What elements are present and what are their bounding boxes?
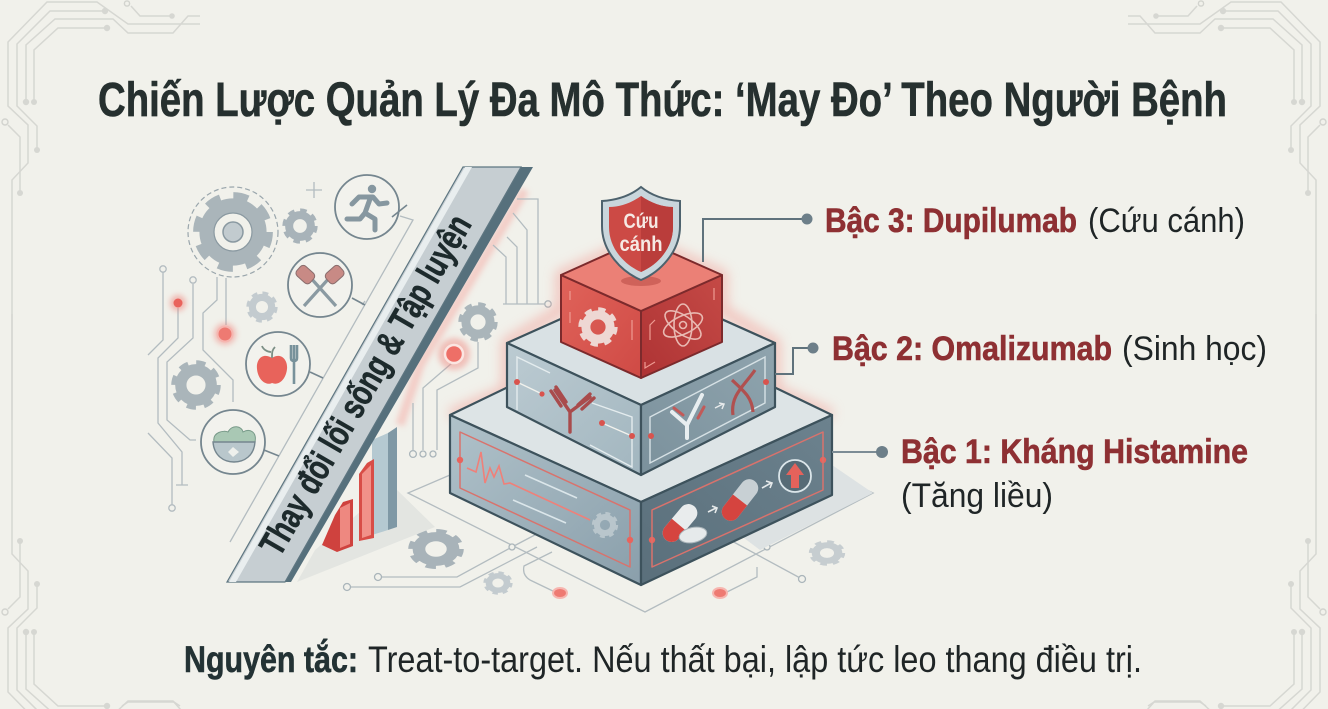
icon: atom	[660, 304, 706, 346]
arrow	[762, 481, 772, 488]
gear near ribbon	[462, 306, 494, 338]
tier 2 left face	[507, 343, 641, 475]
red glow along ribbon	[400, 190, 525, 425]
ribbon text: Thay đổi lối sống & Tập luyện	[251, 207, 479, 562]
tier 2	[507, 283, 775, 475]
icon: crossed dumbbells	[288, 253, 365, 317]
red bar short	[322, 499, 353, 552]
tier 2 name: Bậc 2: Omalizumab	[832, 330, 1112, 368]
floor terminals	[344, 544, 806, 590]
red nodes	[457, 457, 826, 543]
decorative circuit lines, left	[148, 272, 233, 505]
shield face	[609, 196, 673, 272]
connector: tier 3	[703, 214, 812, 262]
icon: capsule	[718, 476, 762, 524]
bar shadow	[297, 485, 435, 582]
tier 2 right inset	[650, 357, 765, 463]
connecting line parallel to ribbon	[230, 216, 413, 542]
bottom border trapezoids	[122, 702, 1206, 706]
tier 1 left face	[450, 415, 641, 585]
floor red node right	[713, 588, 727, 598]
footer lead: Nguyên tắc:	[184, 638, 358, 680]
tier 2 right face	[641, 343, 775, 475]
big gear with dashed orbit	[188, 187, 278, 277]
circuit border: top right	[1128, 1, 1326, 420]
footer principle	[184, 638, 1142, 680]
floor gear small	[486, 573, 510, 593]
small gear	[285, 211, 315, 241]
icon: gear on red face	[582, 311, 614, 343]
red node core	[174, 298, 182, 308]
icon: increase dose	[779, 460, 811, 492]
panel: floor circuit	[344, 473, 873, 612]
label: tier 2	[832, 330, 1267, 368]
tier 3 name: Bậc 3: Dupilumab	[825, 202, 1077, 240]
terminal	[545, 301, 551, 307]
tier 2 left inset	[517, 357, 632, 467]
floor gear right	[812, 542, 842, 564]
red node glow	[214, 323, 236, 345]
light gear	[249, 294, 275, 320]
icon: runner	[335, 175, 407, 239]
footer text: Treat-to-target. Nếu thất bại, lập tức leo thang điều trị.	[368, 639, 1142, 680]
plus mark	[306, 182, 322, 198]
tier 1 right face	[641, 415, 832, 585]
floor diamond outline	[408, 473, 873, 612]
tier 2 top face	[507, 283, 775, 405]
floor gear left	[413, 532, 459, 566]
icon: apple and fork	[246, 332, 323, 396]
icon: tablet	[678, 525, 708, 545]
red bar tall	[359, 459, 374, 541]
small gear on left face	[594, 514, 616, 536]
bracket marks	[570, 288, 714, 368]
circuit border: bottom left	[2, 314, 200, 709]
arrow	[708, 506, 717, 513]
floor traces	[350, 527, 802, 593]
glow	[450, 239, 832, 415]
circuit border: bottom right	[1128, 314, 1326, 709]
tier 3 note: (Cứu cánh)	[1088, 202, 1245, 240]
gear left	[175, 364, 217, 406]
pulse trace	[467, 452, 590, 520]
tier 3 top face	[561, 239, 722, 311]
shield shadow	[621, 276, 661, 286]
red node ring	[218, 326, 232, 342]
icon: pill	[659, 500, 701, 546]
icon: antibody white	[672, 395, 702, 438]
connector: tier 1	[832, 446, 888, 458]
red node	[445, 345, 463, 363]
icon: salad bowl	[201, 410, 279, 474]
arrow	[715, 403, 724, 409]
blue bar	[372, 427, 397, 535]
ribbon face	[227, 167, 521, 582]
traces below	[413, 342, 478, 450]
icon: DNA	[732, 370, 755, 415]
tier 2 note: (Sinh học)	[1122, 330, 1267, 368]
traces above	[493, 199, 545, 304]
tier 1 top face	[450, 323, 832, 502]
white lines	[513, 475, 577, 523]
connector: tier 2	[775, 342, 818, 374]
shield rim	[602, 187, 680, 280]
panel: circuits right of ribbon	[400, 190, 551, 457]
tier 1	[450, 323, 832, 585]
circuit terminals, left	[160, 266, 196, 511]
red nodes	[514, 379, 769, 439]
shield right shade	[641, 196, 673, 272]
red node glow	[438, 338, 470, 370]
tier 3	[561, 187, 722, 378]
red links	[517, 382, 632, 436]
tier 1 name: Bậc 1: Kháng Histamine	[901, 433, 1248, 471]
floor shadow	[720, 465, 873, 550]
tier 3 left face	[561, 275, 641, 378]
red node	[170, 295, 186, 311]
floor red node left	[553, 588, 567, 598]
shield text line 1: Cứu	[624, 210, 658, 233]
tier 1 right panel	[652, 432, 823, 567]
shield	[602, 187, 680, 280]
antibody arms red	[674, 407, 704, 418]
tier 3 right face	[641, 275, 722, 378]
shield text line 2: cánh	[620, 233, 662, 256]
label: tier 1	[901, 433, 1248, 515]
label: tier 3	[825, 202, 1245, 240]
ribbon: lifestyle	[227, 167, 533, 582]
terminals below	[410, 451, 436, 457]
ribbon dark edge	[285, 167, 533, 582]
chart: bars behind ribbon	[297, 427, 435, 582]
circuit border: top left	[2, 1, 200, 420]
pyramid	[450, 187, 873, 585]
icon: antibody red	[551, 387, 594, 432]
panel: lifestyle icons and circuits	[148, 175, 413, 542]
tier 1 left panel	[460, 432, 630, 567]
ribbon highlight	[229, 167, 472, 582]
tier 1 note: (Tăng liều)	[901, 477, 1053, 515]
